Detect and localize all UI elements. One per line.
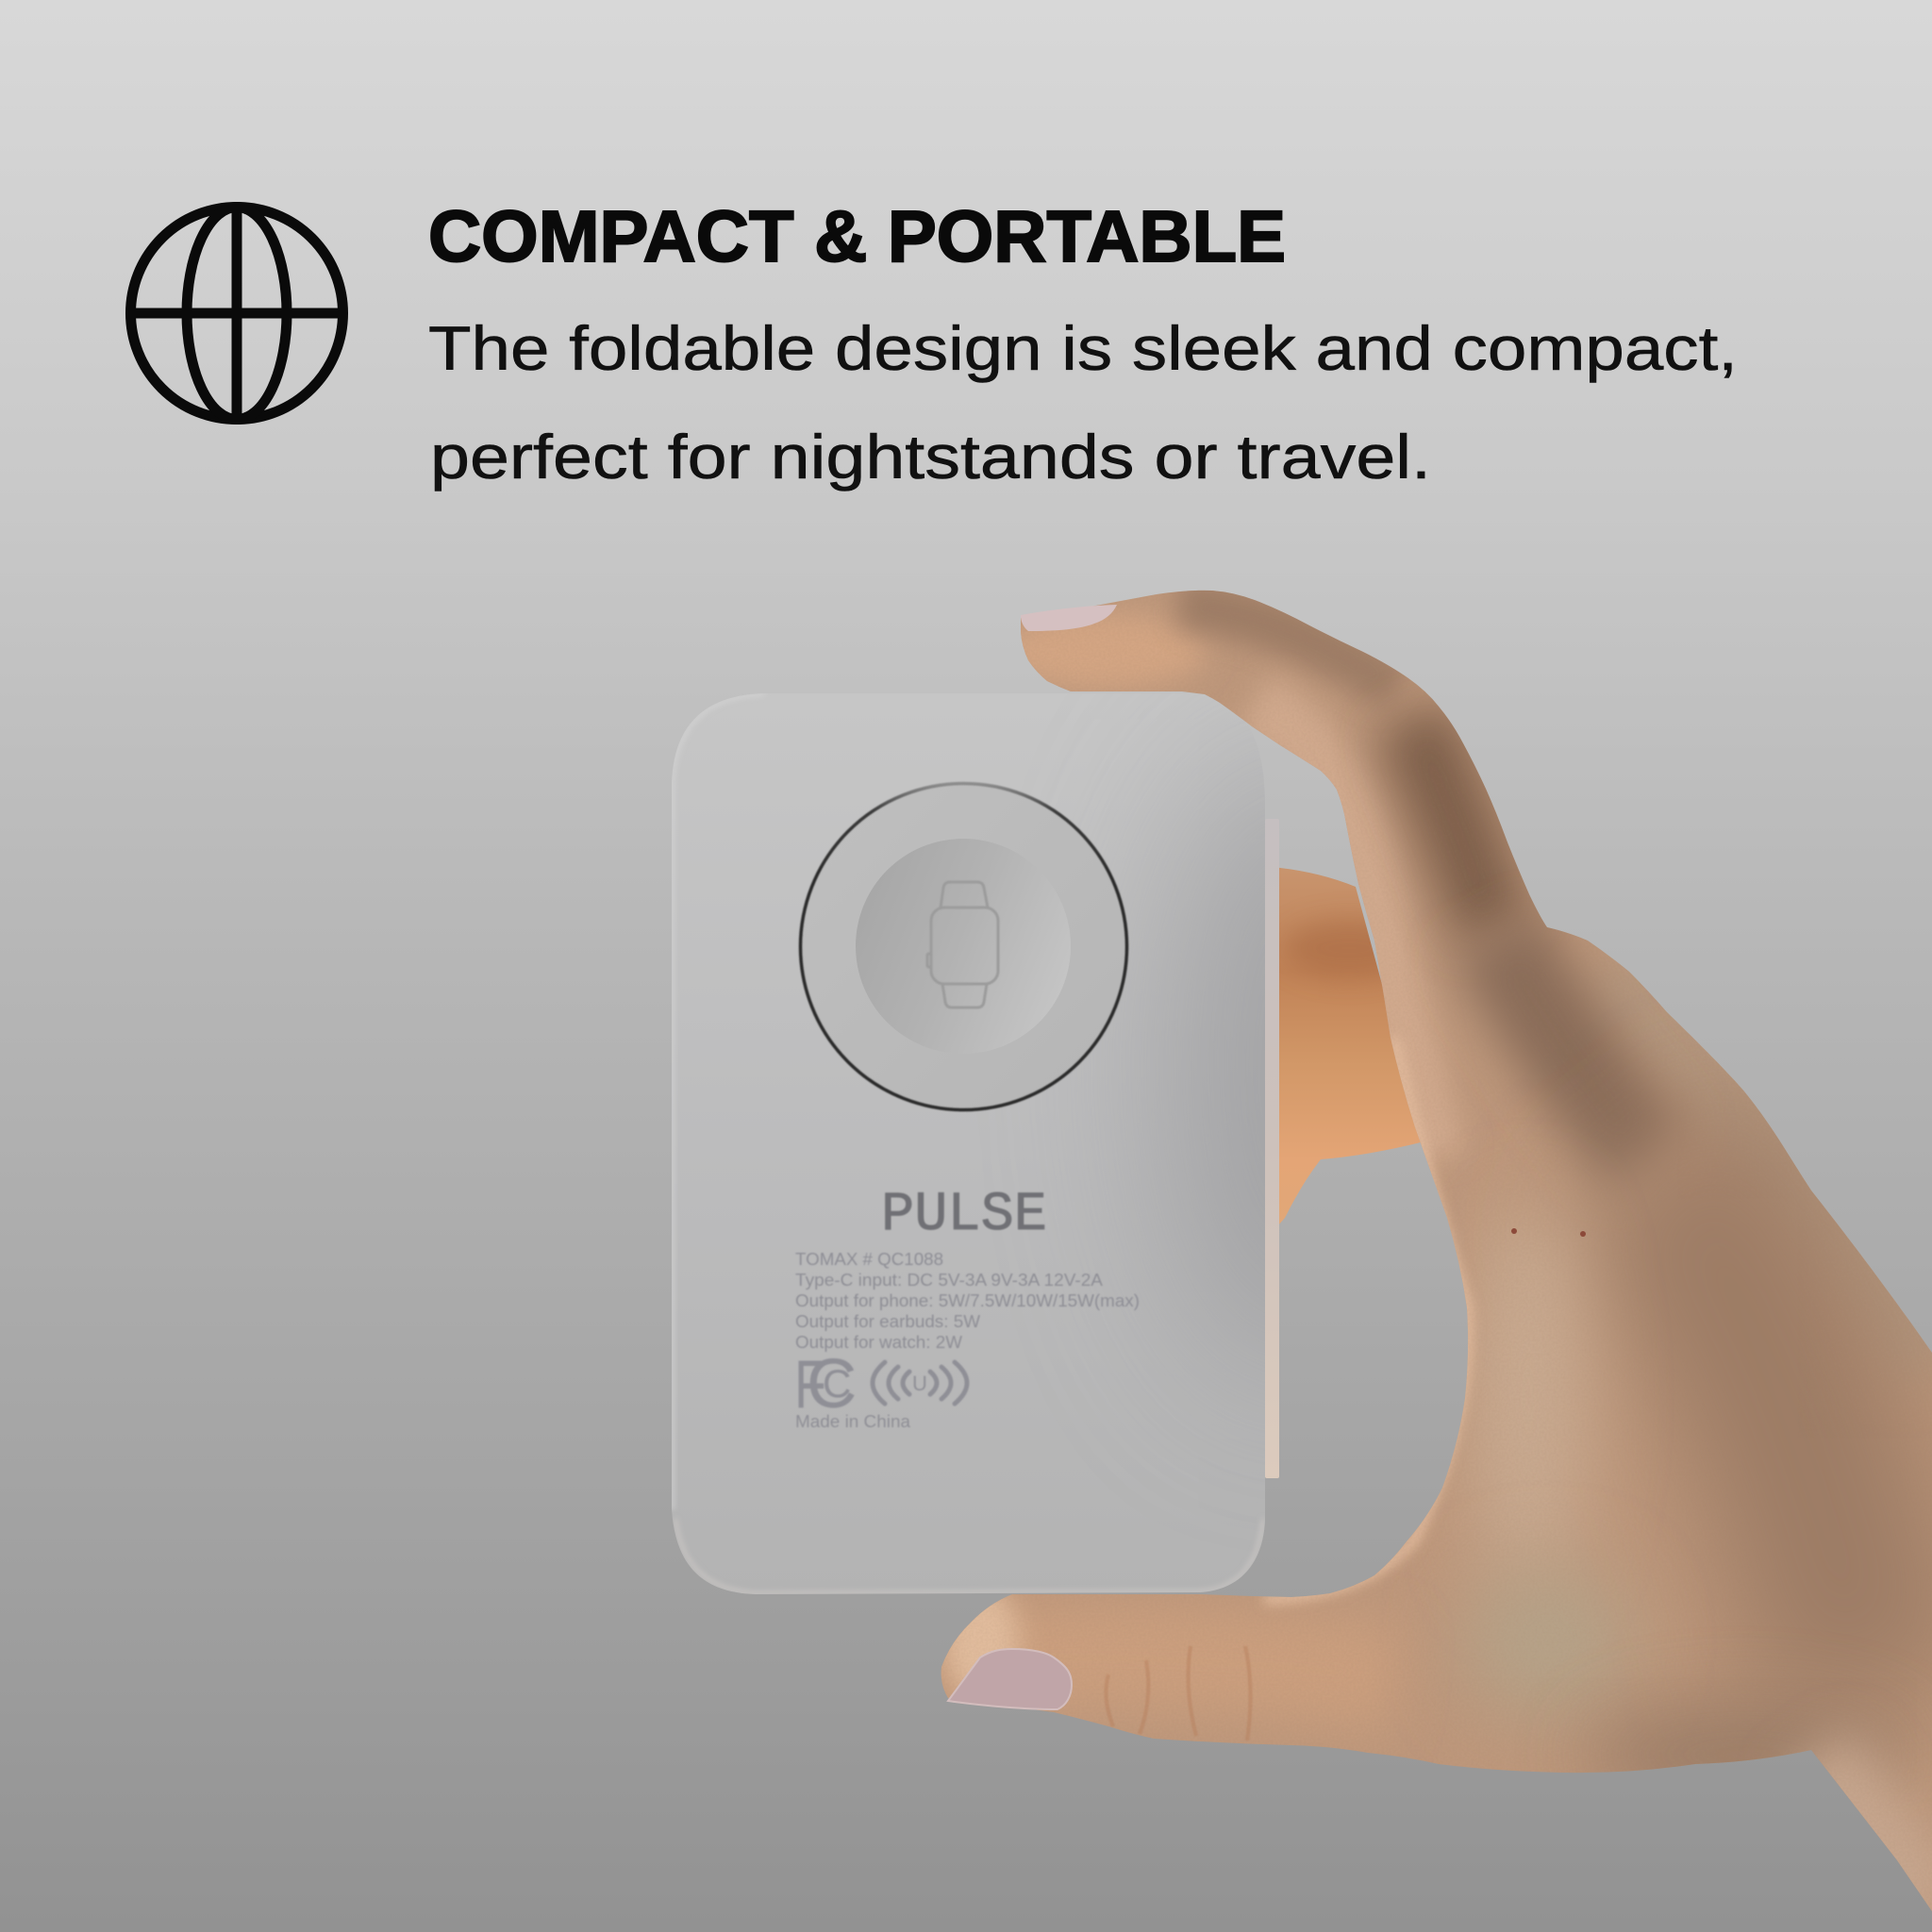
dark underside of hand xyxy=(1585,1707,1906,1802)
specification text: Output for phone: 5W/7.5W/10W/15W(max) xyxy=(795,1291,1140,1310)
thumb colour xyxy=(943,1658,1396,1679)
moles xyxy=(1511,1228,1586,1237)
specification text: TOMAX # QC1088 xyxy=(795,1250,943,1269)
icon: globe xyxy=(130,208,343,419)
body shading xyxy=(673,694,1443,1593)
description text: The foldable design is sleek and compact, xyxy=(428,313,1738,383)
power bank body xyxy=(672,693,1265,1594)
heading: COMPACT & PORTABLE xyxy=(428,196,1286,277)
specification text: Output for earbuds: 5W xyxy=(795,1312,980,1331)
watch charging disc xyxy=(856,839,1071,1054)
fingernail on thumb xyxy=(948,1649,1072,1709)
rear fingers of hand xyxy=(1279,868,1421,1224)
palm rim light xyxy=(1264,1038,1467,1599)
icon: wireless charging mark xyxy=(873,1362,967,1404)
olive light below palm xyxy=(1483,1602,1617,1698)
creases on thumb xyxy=(1106,1646,1251,1740)
icon: FCC mark: C xyxy=(807,1344,857,1423)
icon: FCC mark: F xyxy=(794,1347,826,1423)
dark band at finger knuckle xyxy=(1410,717,1495,934)
description text: perfect for nightstands or travel. xyxy=(430,422,1431,491)
palm light xyxy=(1472,1198,1585,1594)
specification text: Type-C input: DC 5V-3A 9V-3A 12V-2A xyxy=(795,1271,1103,1290)
broad shadow on right side of hand xyxy=(1651,1160,1873,1698)
fingernail on index finger xyxy=(1021,605,1117,631)
hand holding the device xyxy=(924,566,1932,1932)
icon: watch xyxy=(927,882,998,1008)
description text xyxy=(428,313,1738,491)
logo: PULSE xyxy=(881,1185,1047,1246)
specification text: Output for watch: 2W xyxy=(795,1333,962,1352)
lit ridge along upper hand xyxy=(1626,972,1872,1270)
dark band down back of hand xyxy=(1495,934,1651,1160)
brown upper edge of index finger xyxy=(1179,604,1396,689)
warm fingertip xyxy=(1000,613,1208,689)
icon: FCC mark: C xyxy=(823,1361,851,1406)
power bank body: U xyxy=(912,1372,927,1395)
charging ring xyxy=(800,783,1126,1109)
skin texture xyxy=(924,566,1932,1932)
light wrist xyxy=(1816,1755,1932,1911)
specification text: Made in China xyxy=(795,1412,911,1431)
light inner side of index finger xyxy=(1255,703,1434,1160)
thumb tip glow xyxy=(943,1585,1019,1698)
specification text xyxy=(795,1250,1140,1431)
side strip of power bank xyxy=(1265,819,1279,1478)
